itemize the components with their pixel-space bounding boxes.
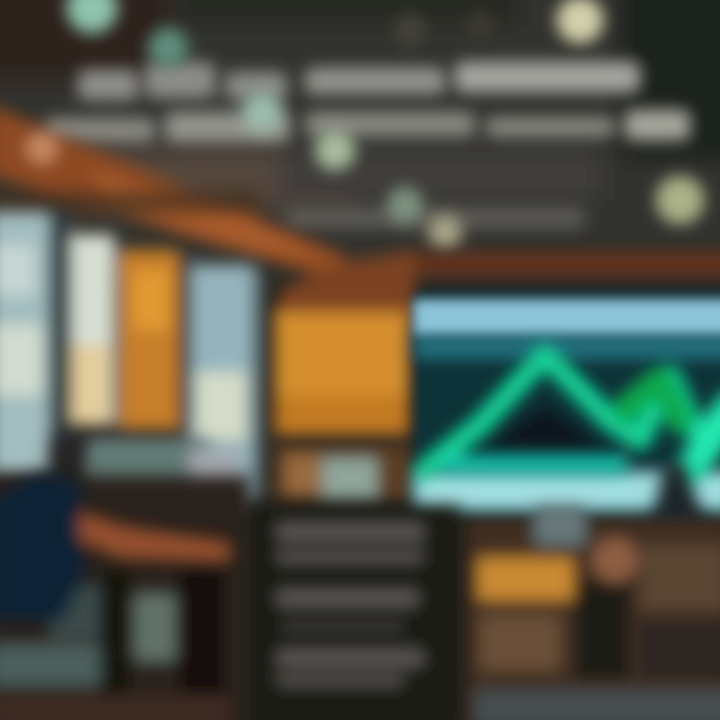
green line chart (425, 355, 720, 470)
text block: chalkboard lines (275, 522, 425, 687)
panel: lower window strip (85, 438, 410, 528)
panel: dark top wall (0, 0, 720, 280)
monitor top band (414, 300, 720, 336)
monitor bottom band (414, 472, 720, 510)
heading: blurred title text (45, 62, 690, 228)
icon: seated person on left (0, 430, 230, 620)
dark mountain fill (480, 405, 610, 452)
panel: chalkboard menu (250, 505, 460, 720)
icon: glowing bokeh lights (67, 0, 704, 249)
panel: orange wall (275, 310, 409, 435)
panel: windows (0, 212, 274, 500)
panel: bottom floor and furniture (465, 505, 720, 720)
panel: wooden ceiling beam (0, 105, 720, 320)
icon: seated person on right (648, 462, 708, 530)
chart: monitor with mountain line (414, 292, 720, 514)
panel: lower left room (0, 475, 250, 720)
